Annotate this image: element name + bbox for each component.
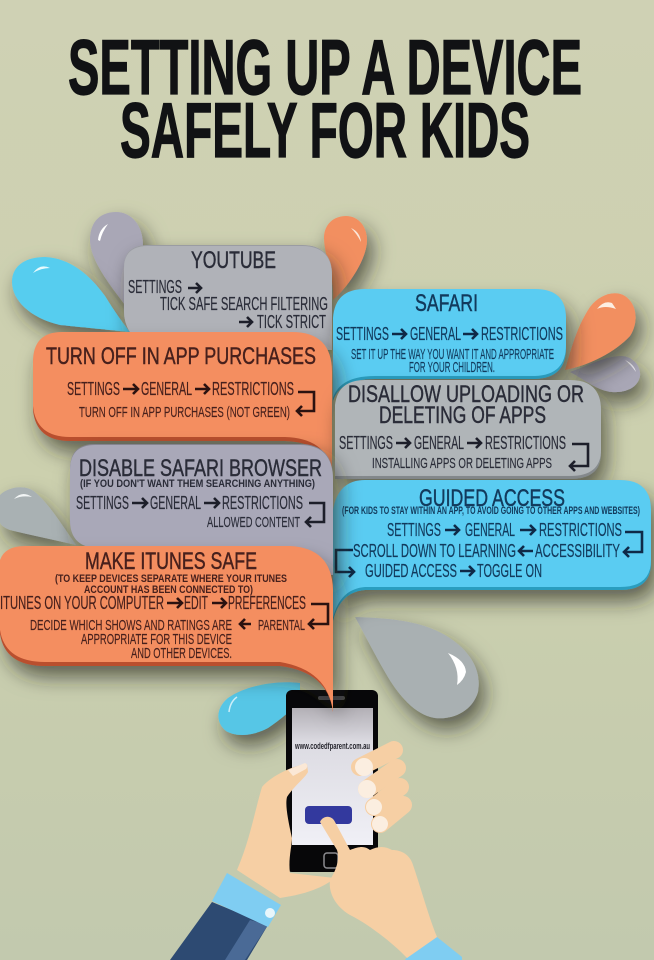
itunes steps: ITUNES ON YOUR COMPUTER	[0, 593, 164, 613]
right hand	[320, 817, 437, 958]
panel: safari	[333, 289, 566, 401]
heading: guided access: GUIDED ACCESS	[419, 485, 565, 512]
disallow steps: INSTALLING APPS OR DELETING APPS	[372, 455, 552, 472]
itunes steps: EDIT	[184, 593, 208, 613]
itunes steps: DECIDE WHICH SHOWS AND RATINGS ARE	[30, 617, 232, 634]
youtube steps: TICK STRICT	[257, 312, 326, 332]
website address: www.codedfparent.com.au	[294, 741, 370, 751]
in app purchases steps: SETTINGS	[67, 379, 120, 399]
heading: make itunes safe: MAKE ITUNES SAFE	[85, 548, 257, 575]
itunes steps: APPROPRIATE FOR THIS DEVICE	[81, 631, 232, 648]
safari steps: SETTINGS	[336, 324, 389, 344]
itunes note: ACCOUNT HAS BEEN CONNECTED TO)	[84, 584, 253, 596]
disallow steps: GENERAL	[414, 433, 464, 453]
heading: disallow: DISALLOW UPLOADING OR	[348, 381, 584, 408]
in app purchases steps: GENERAL	[141, 379, 192, 399]
heading: in app purchases: TURN OFF IN APP PURCHASES	[46, 343, 316, 370]
heading: disable safari browser: DISABLE SAFARI BROWSER	[79, 455, 322, 482]
disallow steps	[339, 433, 588, 472]
left hand	[237, 764, 335, 898]
safari steps: GENERAL	[410, 324, 461, 344]
guided access steps: TOGGLE ON	[477, 561, 542, 581]
safari steps: RESTRICTIONS	[481, 324, 563, 344]
safari steps: FOR YOUR CHILDREN.	[409, 359, 495, 376]
illustration: hands holding phone	[170, 750, 462, 960]
panel: disallow uploading or deleting of apps	[335, 380, 601, 479]
screen button	[305, 806, 352, 824]
title	[68, 23, 582, 174]
disallow steps: SETTINGS	[339, 433, 393, 453]
decorative splash drops	[0, 212, 640, 735]
panel: turn off in app purchases	[33, 332, 332, 474]
itunes steps	[0, 593, 328, 662]
youtube steps: TICK SAFE SEARCH FILTERING	[160, 294, 328, 314]
disable safari steps: SETTINGS	[76, 493, 129, 513]
heading: safari: SAFARI	[415, 290, 478, 317]
guided access steps: GUIDED ACCESS	[365, 561, 457, 581]
fingernails	[355, 758, 388, 832]
fingers	[360, 750, 403, 824]
itunes steps: PARENTAL	[258, 617, 305, 634]
disallow steps: RESTRICTIONS	[485, 433, 566, 453]
itunes steps: AND OTHER DEVICES.	[131, 645, 232, 662]
itunes note	[55, 573, 287, 596]
cuff: left	[212, 873, 281, 927]
cuff: right	[405, 937, 462, 960]
heading: youtube: YOUTUBE	[191, 247, 276, 274]
phone	[286, 690, 378, 872]
panel: guided access	[333, 480, 651, 621]
in app purchases steps	[67, 379, 314, 421]
safari steps	[336, 324, 563, 376]
guided access steps	[336, 520, 642, 581]
guided access steps: SCROLL DOWN TO LEARNING	[353, 541, 516, 561]
guided access steps: SETTINGS	[387, 520, 441, 540]
heading: disallow: DELETING OF APPS	[379, 402, 546, 429]
youtube steps: SETTINGS	[128, 277, 182, 297]
itunes steps: PREFERENCES	[228, 593, 306, 613]
disable safari note: (IF YOU DON'T WANT THEM SEARCHING ANYTHING)	[80, 478, 315, 490]
in app purchases steps: RESTRICTIONS	[212, 379, 294, 399]
youtube steps	[128, 277, 328, 332]
in app purchases steps: TURN OFF IN APP PURCHASES (NOT GREEN)	[79, 404, 290, 421]
panel: make itunes safe	[0, 546, 333, 712]
disable safari steps	[76, 493, 324, 531]
sleeve: left arm	[170, 902, 268, 960]
disable safari steps: GENERAL	[150, 493, 201, 513]
panel: disable safari browser	[70, 444, 333, 575]
guided access steps: GENERAL	[465, 520, 515, 540]
disable safari steps: RESTRICTIONS	[222, 493, 303, 513]
heading: disallow	[348, 381, 584, 429]
itunes note: (TO KEEP DEVICES SEPARATE WHERE YOUR ITUNES	[55, 573, 287, 585]
panel: youtube	[124, 245, 332, 350]
disable safari steps: ALLOWED CONTENT	[207, 514, 300, 531]
phone screen	[292, 708, 373, 845]
